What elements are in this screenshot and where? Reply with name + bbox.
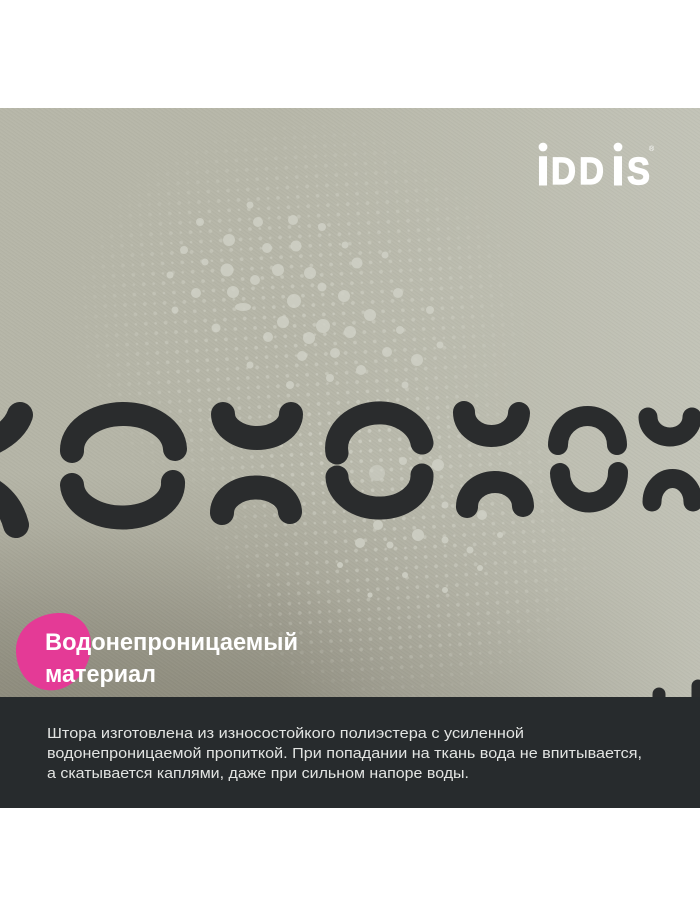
circle 3 — [558, 416, 618, 503]
marks above dark band — [659, 686, 698, 704]
description text — [47, 725, 642, 782]
logo: iddis — [538, 143, 655, 193]
description text: а скатывается каплями, даже при сильном напоре воды. — [47, 765, 469, 782]
heading: материал — [45, 661, 156, 688]
circle 2 — [337, 413, 422, 508]
x 2 — [464, 412, 523, 507]
logo: iddis: I — [613, 151, 623, 193]
xoxo print pattern — [0, 412, 698, 704]
x 3 — [648, 417, 693, 502]
panel: dark description band — [0, 697, 700, 808]
pink accent blob — [16, 613, 91, 690]
partial x at left edge — [0, 415, 20, 525]
logo: iddis: D — [551, 151, 576, 193]
x 1 — [222, 414, 291, 513]
description text: Штора изготовлена из износостойкого полиэстера с усиленной — [47, 725, 524, 742]
logo: iddis: ® — [649, 145, 655, 153]
panel: fabric photo — [0, 108, 700, 697]
heading — [45, 629, 298, 688]
circle 1 — [72, 414, 175, 518]
water droplets — [166, 202, 503, 598]
description text: водонепроницаемой пропиткой. При попадании на ткань вода не впитывается, — [47, 745, 642, 762]
heading: Водонепроницаемый — [45, 629, 298, 656]
logo: iddis: S — [627, 151, 650, 193]
logo: iddis: I — [538, 151, 548, 193]
logo: iddis: D — [579, 151, 604, 193]
